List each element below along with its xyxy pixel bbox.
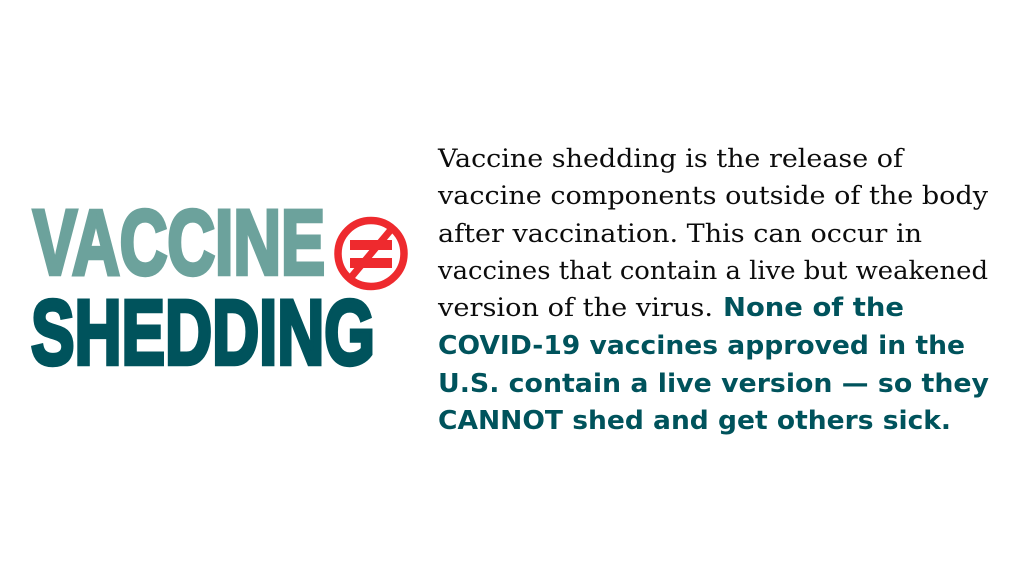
body text: definition: Vaccine shedding is the release of [437,144,905,173]
title: vaccine shedding [31,192,375,384]
highlighted text: key message: CANNOT shed and get others sick. [438,406,951,436]
highlighted text: key message [438,293,989,436]
body text: definition: version of the virus. [437,293,713,322]
body text: definition: vaccines that contain a live but weakened [437,256,988,285]
icon: red circle with not-equal sign [338,220,404,286]
title word: VACCINE: VACCINE [33,192,325,294]
highlighted text: key message: U.S. contain a live version — so they [438,369,989,399]
body text: definition: after vaccination. This can occur in [438,219,922,248]
body text: definition: vaccine components outside of the body [437,181,989,210]
text block: explanation [437,144,989,436]
body text: definition [437,144,989,322]
title word: SHEDDING: SHEDDING [31,282,375,384]
highlighted text: key message: None of the [723,293,904,323]
highlighted text: key message: COVID-19 vaccines approved in the [438,331,965,361]
